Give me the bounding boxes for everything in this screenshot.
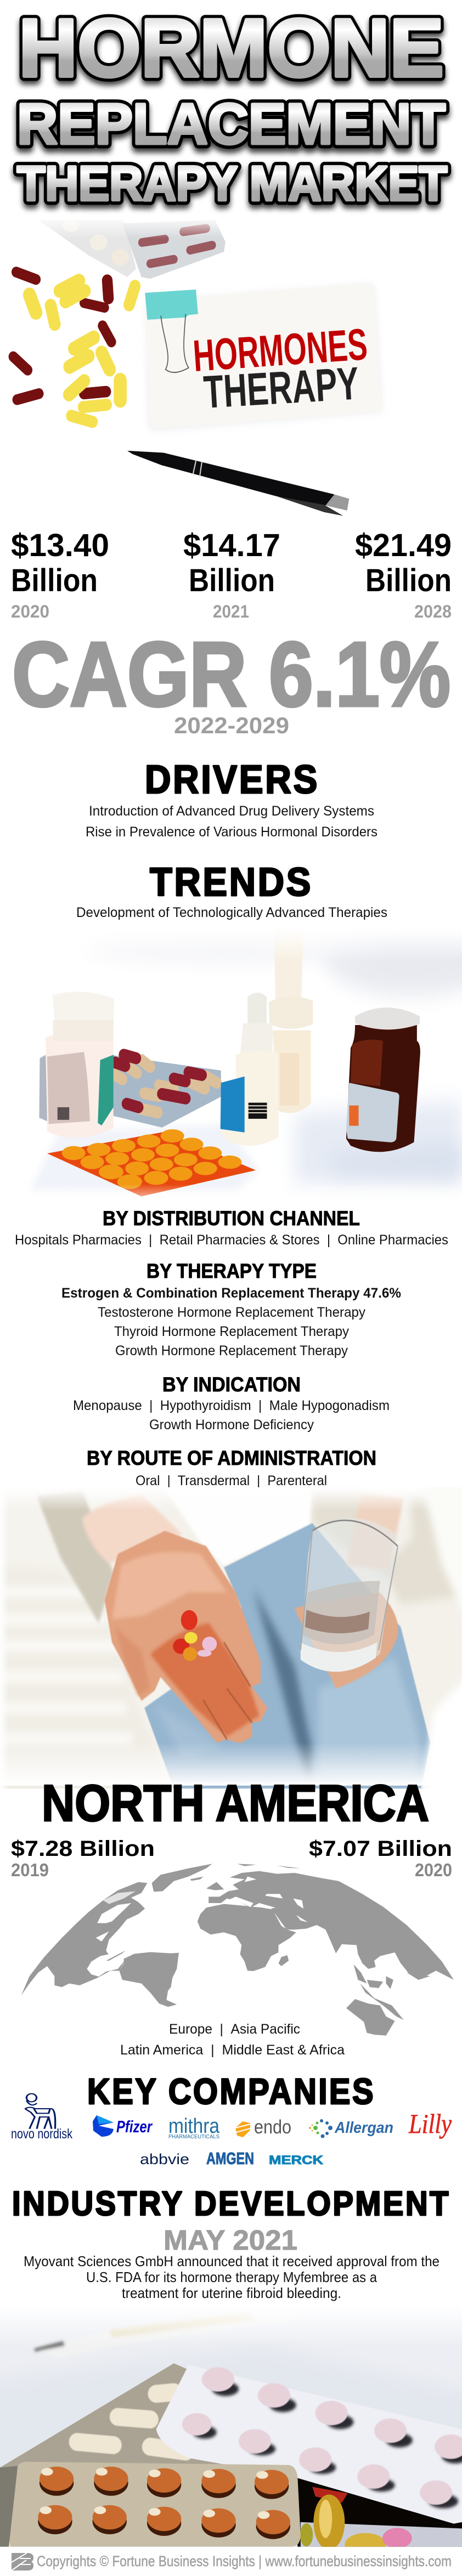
title: HORMONE [19, 2, 444, 94]
by distribution channel [15, 1207, 448, 1248]
title: THERAPY MARKET [17, 160, 447, 214]
drivers [86, 758, 378, 840]
icon: fortune business insights logo [12, 2553, 33, 2571]
by therapy type: BY THERAPY TYPE [147, 1260, 317, 1282]
logo: merck: MERCK [269, 2153, 323, 2167]
north america 2020: 2020 [415, 1860, 452, 1880]
stat: 2021: 2021 [213, 602, 249, 621]
date: MAY 2021 [164, 2224, 297, 2256]
capsule blister [106, 1055, 221, 1128]
title: THERAPY MARKET [17, 156, 447, 211]
logo: mithra: PHARMACEUTICALS [168, 2134, 219, 2140]
by route of administration: BY ROUTE OF ADMINISTRATION [87, 1447, 376, 1469]
development description [24, 2253, 440, 2301]
title: REPLACEMENT [17, 92, 446, 156]
orange tablet blister [0, 2462, 301, 2547]
forearm [82, 1494, 183, 1564]
bottom right dark area and coloured pills [297, 2478, 462, 2547]
by distribution channel: BY DISTRIBUTION CHANNEL [103, 1207, 360, 1230]
stat: 2020: Billion [11, 563, 98, 598]
trends: TRENDS [150, 860, 313, 904]
development description: U.S. FDA for its hormone therapy Myfembree as a [86, 2269, 377, 2285]
rear dropper bottle [269, 929, 313, 1113]
silver blister [0, 2363, 224, 2471]
stat: 2020: 2020 [11, 602, 49, 621]
logo: novo nordisk [11, 2094, 72, 2142]
market size figures [11, 528, 452, 621]
by indication [73, 1373, 390, 1433]
pills in hand [173, 1610, 217, 1661]
by route of administration: Oral | Transdermal | Parenteral [136, 1473, 327, 1488]
development description: Myovant Sciences GmbH announced that it received approval from the [24, 2253, 440, 2269]
drivers: Introduction of Advanced Drug Delivery Systems [89, 803, 374, 819]
other regions: Latin America | Middle East & Africa [120, 2042, 345, 2058]
stat: 2020 [11, 528, 109, 621]
photo: medicine bottles and blister packs [33, 938, 462, 1197]
stat: 2028: $21.49 [355, 528, 452, 563]
development description: treatment for uterine fibroid bleeding. [122, 2285, 341, 2301]
company logos [11, 2094, 452, 2168]
photo: hormones therapy card with pills and pen [0, 215, 382, 516]
by therapy type: Growth Hormone Replacement Therapy [115, 1343, 348, 1358]
amber jar [346, 1007, 420, 1152]
photo: hand holding pills and glass of water [0, 1481, 462, 1808]
logo: amgen: AMGEN [206, 2149, 254, 2168]
orange tablet blister [47, 1129, 256, 1197]
by indication: Growth Hormone Deficiency [149, 1417, 314, 1433]
logo: endo: endo [254, 2116, 291, 2138]
other regions [120, 2022, 345, 2058]
white blister [156, 2365, 462, 2524]
logo: lilly: Lilly [408, 2108, 452, 2139]
north america 2019 [11, 1837, 155, 1880]
world map [15, 1864, 454, 2036]
by distribution channel: Hospitals Pharmacies | Retail Pharmacies & Stores | Online Pharmacies [15, 1232, 448, 1248]
logo: endo [235, 2116, 291, 2138]
key companies heading: KEY COMPANIES [87, 2071, 375, 2111]
stat: 2020: $13.40 [11, 528, 109, 563]
logo: pfizer: Pfizer [116, 2117, 153, 2136]
open hand [105, 1531, 268, 1743]
right hand and glass [295, 1492, 404, 1689]
north america 2020 [309, 1837, 452, 1880]
by therapy type: Estrogen & Combination Replacement Therapy 47.6% [61, 1286, 401, 1301]
north america 2020: $7.07 Billion [309, 1837, 452, 1861]
photo: hormones therapy card with pills and pen: THERAPY [202, 357, 360, 418]
by route of administration [87, 1447, 376, 1488]
blurred thermometer [33, 2314, 251, 2353]
photo: hormones therapy card with pills and pen: HORMONES [191, 320, 369, 381]
logo: novo nordisk: novo nordisk [11, 2126, 72, 2142]
logo: abbvie: abbvie [140, 2151, 189, 2167]
jeans [144, 1523, 430, 1788]
stat: 2028: 2028 [414, 602, 452, 621]
title: REPLACEMENT [17, 97, 446, 161]
logo: allergan: Allergan [334, 2119, 393, 2137]
north america 2019: $7.28 Billion [11, 1837, 155, 1861]
by therapy type [61, 1260, 401, 1358]
stat: 2021 [183, 528, 280, 621]
by indication: BY INDICATION [162, 1373, 301, 1396]
photo: blister packs [0, 2313, 462, 2547]
title: HORMONE [19, 5, 444, 98]
logo: mithra: mithra [168, 2115, 220, 2138]
logo: allergan [309, 2119, 393, 2138]
logo: pfizer [93, 2115, 153, 2137]
white pill bottle [39, 992, 114, 1138]
white dropper bottle [221, 993, 278, 1146]
CAGR period: 2022-2029 [174, 712, 289, 738]
other regions: Europe | Asia Pacific [169, 2022, 300, 2037]
by indication: Menopause | Hypothyroidism | Male Hypogonadism [73, 1398, 390, 1413]
by therapy type: Testosterone Hormone Replacement Therapy [98, 1305, 365, 1320]
trends: Development of Technologically Advanced Therapies [76, 905, 387, 920]
footer [12, 2553, 452, 2571]
title: HORMONE [19, 2, 444, 94]
title: REPLACEMENT [17, 92, 446, 156]
stat: 2021: Billion [189, 563, 275, 598]
title: THERAPY MARKET [17, 156, 447, 211]
drivers: Rise in Prevalence of Various Hormonal Disorders [86, 824, 378, 840]
trends [76, 860, 387, 920]
by therapy type: Thyroid Hormone Replacement Therapy [114, 1324, 349, 1339]
stat: 2021: $14.17 [183, 528, 280, 563]
title [17, 2, 447, 214]
north america 2019: 2019 [11, 1860, 49, 1880]
stat: 2028 [355, 528, 452, 621]
stat: 2028: Billion [365, 563, 452, 598]
drivers: DRIVERS [145, 758, 319, 802]
